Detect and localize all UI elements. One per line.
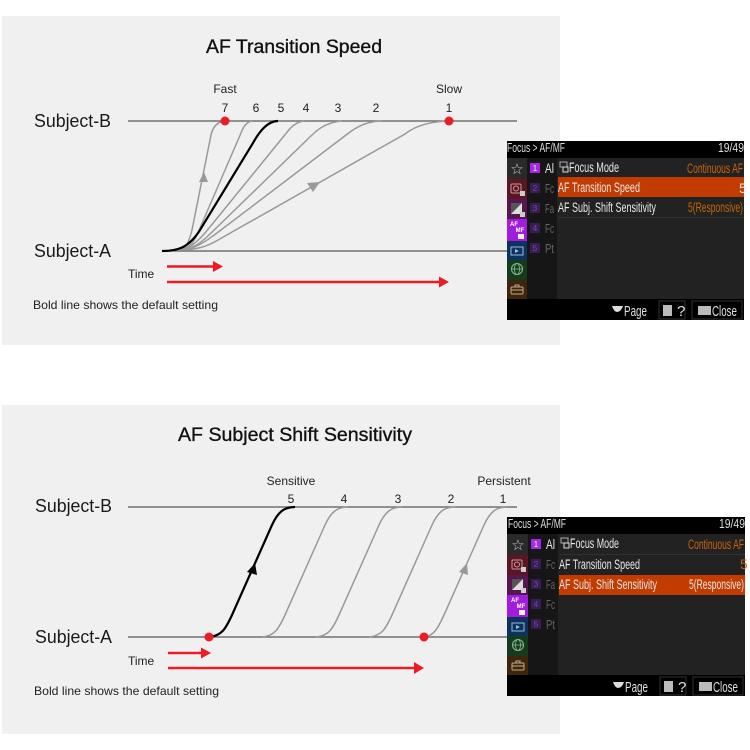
- arrowheads on curves: [247, 563, 468, 575]
- speed numbers: 7: [222, 101, 229, 115]
- header text: Focus > AF/MF: [507, 140, 565, 155]
- sensitivity numbers: 5: [288, 492, 295, 506]
- time arrows: [168, 648, 424, 674]
- label: Time: Time: [128, 267, 155, 281]
- speed numbers: 3: [335, 101, 342, 115]
- footer: Close: [712, 303, 737, 320]
- note: Bold line shows the default setting: [33, 298, 218, 312]
- footer: [613, 677, 743, 696]
- speed numbers: [222, 101, 453, 115]
- sensitivity numbers: 2: [448, 492, 455, 506]
- header text: Focus > AF/MF: [508, 516, 566, 531]
- camera menu screen: AF Transition Speed selected: 19/49: [718, 140, 744, 155]
- menu rows: 5: [740, 557, 748, 572]
- speed numbers: 1: [446, 101, 453, 115]
- footer: ?: [677, 303, 685, 320]
- start point markers: [204, 632, 428, 642]
- menu rows: 5: [739, 181, 747, 196]
- sensitivity numbers: 1: [500, 492, 507, 506]
- heading: AF Transition Speed: AF Transition Speed: [206, 37, 382, 58]
- speed numbers: 2: [373, 101, 380, 115]
- page list: 1: [533, 164, 538, 173]
- menu rows: AF Transition Speed: [559, 557, 640, 572]
- label: Sensitive: Sensitive: [267, 474, 316, 488]
- page list: 4: [534, 600, 539, 609]
- page list: 5: [534, 620, 539, 629]
- camera menu screen: AF Subj. Shift Sensitivity selected: [507, 516, 748, 696]
- menu rows: AF Transition Speed: [558, 180, 640, 195]
- menu rows: Focus Mode: [569, 160, 619, 175]
- menu rows: [559, 536, 748, 592]
- menu rows: AF Subj. Shift Sensitivity: [558, 200, 656, 215]
- page list: 2: [534, 560, 539, 569]
- page list: Pt: [546, 617, 555, 632]
- page list: 3: [533, 204, 538, 213]
- label: Persistent: Persistent: [477, 474, 531, 488]
- page list: [530, 161, 554, 256]
- menu rows: Focus Mode: [570, 536, 619, 551]
- arrowheads on curves: [199, 172, 320, 192]
- camera menu screen: AF Transition Speed selected: [507, 140, 747, 320]
- page list: [531, 537, 555, 632]
- speed numbers: 5: [278, 101, 285, 115]
- speed numbers: 4: [303, 101, 310, 115]
- sidebar tabs: MF: [517, 604, 526, 610]
- sensitivity numbers: [288, 492, 507, 506]
- page list: 1: [534, 540, 539, 549]
- sidebar tabs: AF: [510, 222, 518, 228]
- footer: Page: [624, 303, 647, 320]
- label: Fast: Fast: [213, 82, 237, 96]
- page list: Fc: [546, 597, 555, 612]
- page list: Fa: [546, 577, 555, 592]
- sidebar tabs: MF: [516, 228, 525, 234]
- label: Subject-A: Subject-A: [35, 627, 112, 647]
- page list: Fc: [546, 557, 555, 572]
- label: Slow: Slow: [436, 82, 462, 96]
- time arrows: [167, 261, 449, 288]
- page list: Al: [546, 537, 555, 552]
- speed numbers: 6: [253, 101, 260, 115]
- label: Subject-B: Subject-B: [34, 111, 111, 131]
- page list: Fc: [545, 221, 554, 236]
- panel: AF Transition Speed: [2, 16, 560, 345]
- label: Subject-B: Subject-B: [35, 496, 112, 516]
- page list: 2: [533, 184, 538, 193]
- page list: 5: [533, 244, 538, 253]
- label: Subject-A: Subject-A: [34, 241, 111, 261]
- subject lines: [128, 121, 517, 251]
- highlighted row: [559, 575, 745, 595]
- note: Bold line shows the default setting: [34, 684, 219, 698]
- subject lines: [128, 507, 517, 637]
- sensitivity numbers: 3: [395, 492, 402, 506]
- page list: 4: [533, 224, 538, 233]
- page list: Fc: [545, 181, 554, 196]
- page list: Al: [545, 161, 554, 176]
- sidebar tabs: ☆: [510, 161, 524, 178]
- menu rows: AF Subj. Shift Sensitivity: [559, 577, 657, 592]
- sidebar tabs: AF: [511, 598, 519, 604]
- sidebar tabs: ☆: [511, 537, 525, 554]
- sensitivity numbers: 4: [341, 492, 348, 506]
- highlighted row: [558, 177, 744, 197]
- footer: [612, 301, 742, 320]
- sidebar tabs: [507, 534, 528, 675]
- page list: Fa: [545, 201, 554, 216]
- shift curves: [209, 507, 507, 637]
- page list: 3: [534, 580, 539, 589]
- footer: Page: [625, 679, 648, 696]
- panel: AF Subject Shift Sensitivity: [2, 405, 560, 734]
- heading: AF Subject Shift Sensitivity: AF Subject Shift Sensitivity: [178, 425, 413, 446]
- menu rows: [558, 160, 747, 218]
- sidebar tabs: [507, 158, 527, 299]
- label: Time: Time: [128, 654, 155, 668]
- end point markers: [220, 116, 454, 126]
- footer: ?: [678, 679, 686, 696]
- transition curves: [162, 121, 448, 251]
- page list: Pt: [545, 241, 554, 256]
